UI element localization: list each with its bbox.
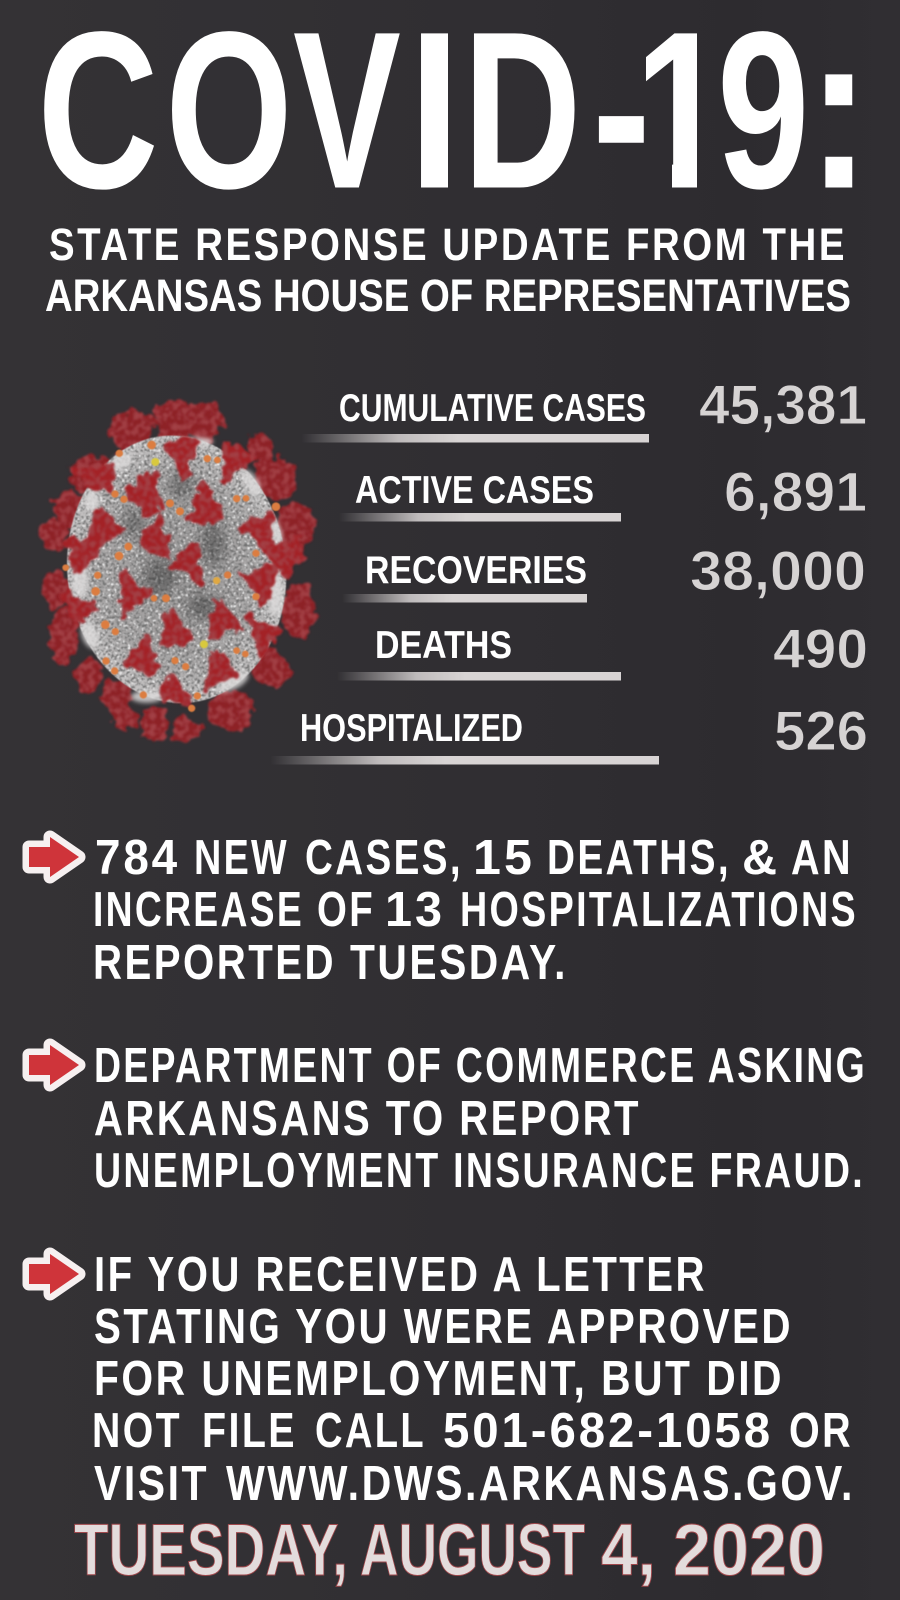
date footer: TUESDAY,: [74, 1510, 348, 1591]
bullet: letter warning: CALL: [315, 1404, 426, 1458]
sphere: [54, 425, 299, 714]
stat row: cumulative cases: 45,381: [699, 373, 867, 436]
bullet: letter warning: OR: [789, 1404, 853, 1458]
coronavirus illustration: [39, 400, 315, 745]
bullet: new cases: INCREASE: [93, 883, 304, 937]
bullet: new cases: 13: [385, 883, 445, 937]
stat row: recoveries: RECOVERIES: [365, 549, 587, 592]
light rim patches: [72, 437, 286, 703]
outer spikes: [39, 400, 315, 745]
bullet: letter warning: [92, 1248, 855, 1511]
icon: arrow 2: [29, 1045, 79, 1085]
stat row: hospitalized: [270, 699, 868, 764]
bullet: new cases: OF: [317, 883, 375, 937]
subtitle: [45, 219, 851, 321]
bullet: new cases: NEW: [194, 831, 289, 885]
stat row: active cases: 6,891: [724, 460, 867, 523]
bullet: department of commerce: ARKANSANS TO REPORT: [94, 1092, 641, 1146]
bullet: new cases: TUESDAY.: [350, 936, 568, 990]
icon: arrow 1: [29, 837, 79, 877]
stat row: hospitalized: 526: [774, 699, 868, 762]
bullet: letter warning: FILE: [202, 1404, 297, 1458]
bullet: new cases: 784: [95, 831, 180, 885]
stat row: deaths: DEATHS: [375, 624, 512, 667]
stat row: cumulative cases: CUMULATIVE CASES: [339, 387, 646, 430]
bullet: department of commerce: [94, 1039, 867, 1198]
date footer: [74, 1510, 825, 1591]
bullet: new cases: REPORTED: [93, 936, 336, 990]
bullet: new cases: DEATHS,: [547, 831, 731, 885]
date footer: AUGUST: [360, 1510, 585, 1591]
orange and yellow dots: [62, 441, 280, 712]
title: [44, 31, 852, 190]
inner spikes: [65, 442, 300, 703]
bullet: letter warning: FOR UNEMPLOYMENT, BUT DID: [94, 1352, 784, 1406]
stat row: active cases: ACTIVE CASES: [355, 469, 594, 512]
bullet: new cases: AN: [791, 831, 853, 885]
bullet: new cases: [93, 831, 858, 990]
stat row: deaths: [337, 617, 868, 680]
stat row: cumulative cases: [301, 373, 867, 442]
date footer: 4,: [601, 1510, 656, 1591]
stat row: recoveries: 38,000: [690, 539, 866, 602]
bullet: new cases: 15: [473, 831, 535, 885]
date footer: 2020: [673, 1510, 825, 1591]
bullet: letter warning: IF YOU RECEIVED A LETTER: [94, 1248, 707, 1302]
dark centre patches: [123, 472, 225, 620]
bullet: new cases: CASES,: [305, 831, 463, 885]
bullet: new cases: &: [742, 831, 780, 885]
bullet: letter warning: VISIT: [94, 1457, 209, 1511]
icon: arrow 3: [29, 1254, 79, 1294]
stat row: recoveries: [342, 539, 866, 602]
stat row: deaths: 490: [773, 617, 868, 680]
bullet: letter warning: NOT: [92, 1404, 182, 1458]
bullet: letter warning: 501-682-1058: [443, 1404, 773, 1458]
stat row: hospitalized: HOSPITALIZED: [300, 707, 523, 750]
stat row: active cases: [339, 460, 867, 523]
